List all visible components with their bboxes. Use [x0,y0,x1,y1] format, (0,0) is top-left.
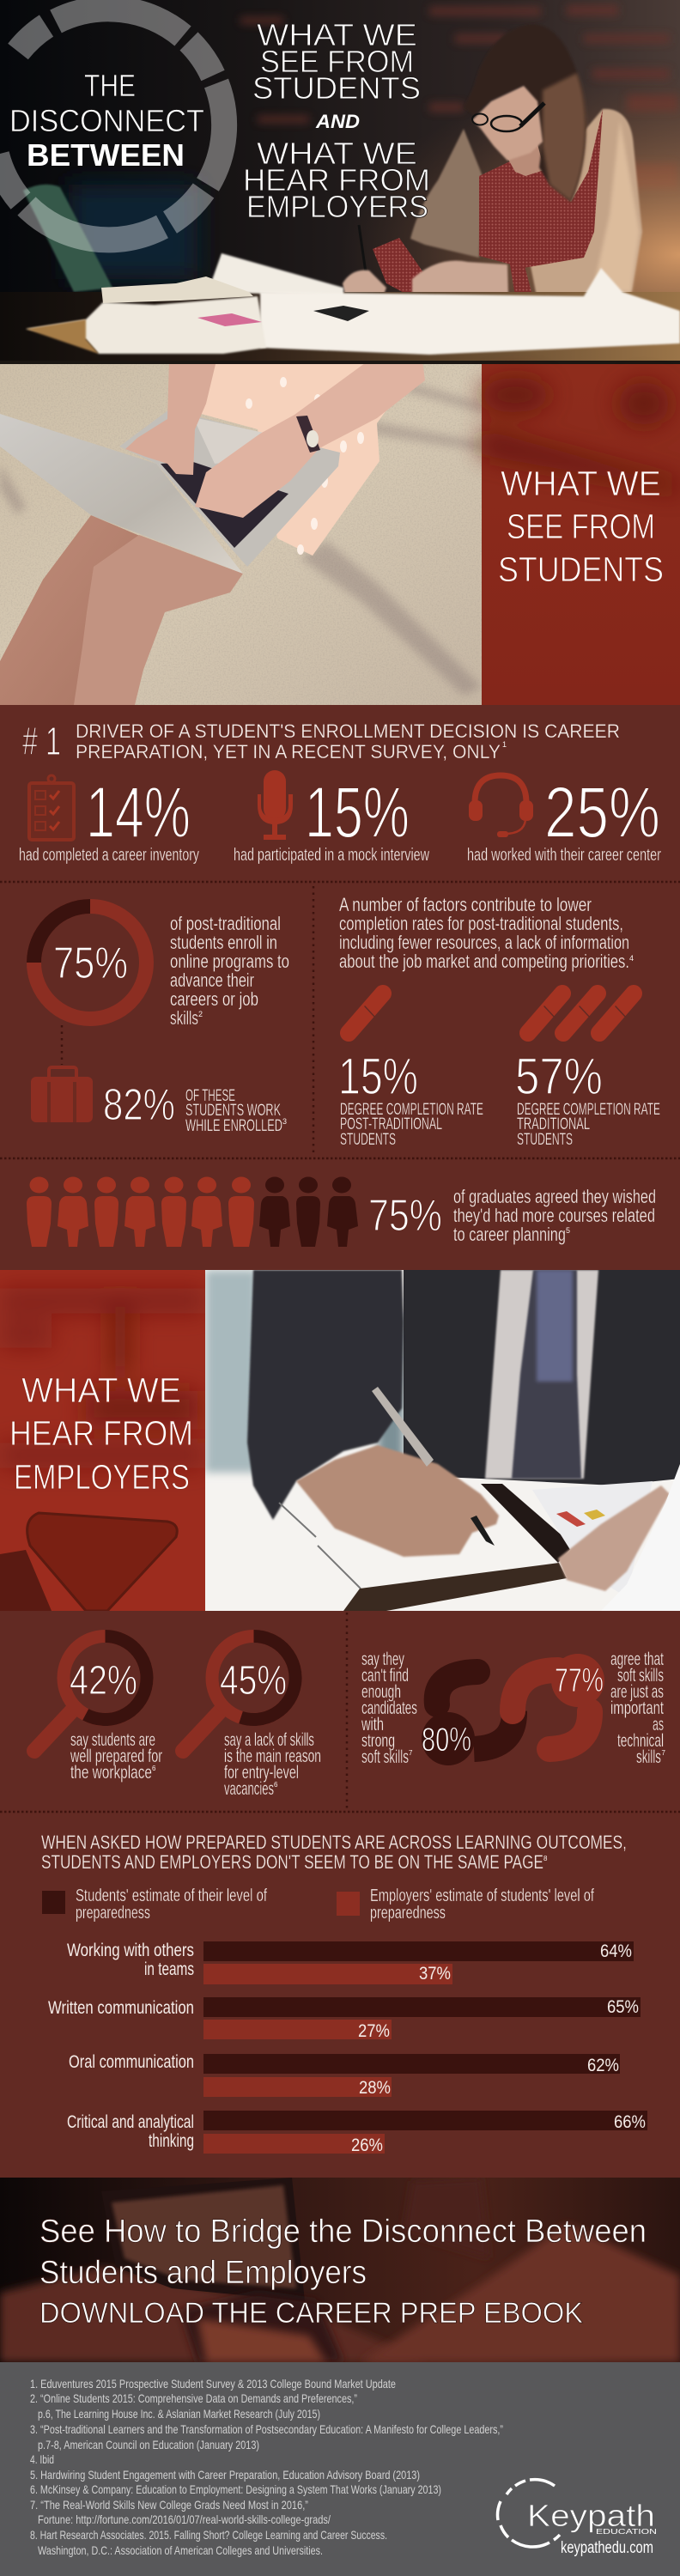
references: 3. “Post-traditional Learners and the Transformation of Postsecondary Education: A Manifesto for College Leaders,” [30,2422,503,2436]
stat: 82%: WHILE ENROLLED [185,1117,282,1135]
right arm and hand [195,361,425,518]
text: can't find candidates: 7 [409,1749,413,1757]
back leg [0,515,142,705]
text: can't find candidates: candidates [361,1698,417,1718]
right sleeve [529,109,642,296]
hero heading center: WHAT WE [257,136,417,171]
pencil [357,225,367,270]
row: critical thinking: 66% [614,2112,646,2132]
heading: WHAT WE [21,1370,181,1410]
stat: 15% degree completion: 15% [338,1048,418,1105]
row: oral communication [69,2052,620,2098]
references [30,2377,503,2557]
text: post-traditional students: advance their [170,969,254,991]
laptop base [119,410,340,567]
legend: employers: preparedness [370,1904,446,1923]
text: post-traditional students: skills [170,1007,198,1029]
neck [508,144,543,176]
left arm and hand [125,361,216,475]
heading [498,464,664,589]
references: 6. McKinsey & Company: Education to Employment: Designing a System That Works (January 2013) [30,2482,441,2496]
text: can't find candidates: can't find [361,1666,409,1686]
row: critical thinking: 26% [351,2136,383,2155]
references: Washington, D.C.: Association of American Colleges and Universities. [38,2543,323,2557]
text: well prepared: the workplace [70,1763,152,1783]
magnifier chart: 45%: 45% [220,1658,287,1704]
text: well prepared: say students are [70,1730,155,1750]
references: p.7-8, American Council on Education (January 2013) [38,2438,259,2451]
row: written communication [48,1997,641,2041]
strip over section top [0,361,680,364]
row: critical thinking [67,2111,647,2155]
cta text [39,2214,647,2330]
stat: 14%: had completed a career inventory [19,846,199,865]
references: Fortune: http://fortune.com/2016/01/07/real-world-skills-college-grads/ [38,2512,331,2526]
legend: students: preparedness [76,1904,150,1923]
chart paper [532,1481,653,1597]
hero heading center: HEAR FROM [243,162,430,197]
hero heading left: BETWEEN [27,137,185,173]
front leg [74,535,243,705]
stat: 15% degree completion [338,1048,483,1149]
stat: 25% [467,772,661,865]
face [472,86,543,161]
#1 driver heading: 1 [502,740,507,749]
heading: EMPLOYERS [14,1457,190,1497]
stat: 15% [234,772,429,865]
cta text: Students and Employers [39,2255,367,2291]
shirt [485,1270,598,1479]
row: critical thinking: Critical and analytical [67,2112,194,2132]
stat: 14%: 14% [86,772,191,853]
icon: diploma [349,993,383,1033]
keypath logo: keypathedu.com [561,2539,653,2557]
woman [343,24,642,311]
#1 driver heading: PREPARATION, YET IN A RECENT SURVEY, ONLY [76,741,501,762]
red cuffs [373,238,531,296]
call to action panel [0,2178,680,2362]
legend: students: Students' estimate of their level of [76,1886,267,1905]
references: 8. Hart Research Associates. 2015. Falling Short? College Learning and Career Success. [30,2528,387,2542]
text: can't find candidates: with [361,1715,384,1735]
#1 driver heading: DRIVER OF A STUDENT'S ENROLLMENT DECISION IS CAREER [76,720,620,742]
icons: three diplomas [528,993,634,1033]
text: soft skills important: 7 [662,1749,666,1757]
keypath logo: EDUCATION [596,2528,657,2536]
tie [512,1270,581,1479]
notebook rings [279,1503,361,1589]
dress [202,364,386,556]
stat: 15% degree completion: POST-TRADITIONAL [340,1115,442,1133]
photo: employer writing in notebook [205,1270,680,1611]
references: 7. “The Real-World Skills New College Grads Need Most in 2016,” [30,2498,308,2512]
text: factors: 4 [629,954,634,963]
stat: 75% graduates: 75% [368,1191,442,1241]
row: critical thinking: thinking [149,2131,194,2151]
row: oral communication: Oral communication [69,2052,194,2072]
text: can't find candidates: enough [361,1682,401,1702]
watch [296,416,320,453]
linked chain graphic: 80% and 77%: 80% [422,1722,471,1759]
text: can't find candidates: strong [361,1731,395,1751]
donut chart: 75% [34,907,146,1018]
icon: headset [469,775,533,837]
stat: 57% degree completion: STUDENTS [517,1131,573,1149]
notebook [101,276,253,303]
magnifier chart: 42%: 42% [70,1658,137,1704]
stat: 15%: had participated in a mock interview [234,846,429,865]
#1 driver heading [22,719,620,763]
text: soft skills important [610,1649,666,1767]
text: post-traditional students: online programs to [170,951,289,972]
text: post-traditional students: students enroll in [170,932,277,953]
hero heading center: STUDENTS [252,70,421,106]
stat: 15% degree completion: DEGREE COMPLETION RATE [340,1101,483,1119]
text: can't find candidates: soft skills [361,1747,409,1767]
legend: students [42,1886,267,1923]
hero panel [0,0,680,364]
text: lack of skills: say a lack of skills [224,1730,314,1750]
hair [464,24,586,202]
text: well prepared: 6 [152,1765,156,1772]
chart heading [41,1832,627,1873]
row: working with others: in teams [144,1959,194,1979]
stat: 82%: 3 [282,1117,287,1126]
photo: student with laptop [0,361,482,705]
left sleeve [410,129,483,258]
red dress [479,109,603,268]
text: lack of skills: vacancies [224,1779,274,1799]
text: can't find candidates [361,1649,417,1767]
row: oral communication: 28% [359,2078,391,2098]
heading: WHAT WE [501,464,661,503]
row: written communication: Written communication [48,1998,194,2018]
panel: what we see from students [481,364,680,705]
heading: HEAR FROM [9,1413,193,1453]
panel: what we hear from employers [0,1270,205,1611]
references: 4. Ibid [30,2452,54,2466]
keyboard [161,462,288,548]
text: factors [339,894,634,972]
cta text: DOWNLOAD THE CAREER PREP EBOOK [39,2297,583,2330]
row: written communication: 27% [358,2021,390,2041]
carpet [0,364,482,705]
stat: 15%: 15% [305,772,410,853]
text: well prepared [70,1730,162,1783]
dark phone case [481,1484,574,1563]
text: lack of skills: is the main reason [224,1747,321,1766]
donut chart: 75%: 75% [53,939,128,988]
hands [342,259,510,292]
text: post-traditional students: 2 [198,1010,203,1018]
hero heading left: DISCONNECT [9,103,204,138]
linked chain graphic: 80% and 77%: 77% [555,1662,604,1699]
stat: 82% [103,1080,287,1135]
bar chart [48,1941,647,2155]
icon: clipboard [29,775,74,840]
text: lack of skills: 6 [274,1781,278,1789]
row: written communication: 65% [607,1997,639,2017]
icon: briefcase [31,1067,93,1122]
references: 2. “Online Students 2015: Comprehensive Data on Demands and Preferences,” [30,2391,357,2405]
table and papers [0,292,680,364]
stat: 57% degree completion: TRADITIONAL [517,1115,590,1133]
row: working with others [67,1941,634,1984]
linked chain graphic: 80% and 77% [422,1654,604,1765]
text: soft skills important: as [653,1715,664,1735]
glasses [472,103,544,131]
text: post-traditional students: careers or job [170,988,258,1010]
stat: 82%: STUDENTS WORK [185,1102,281,1120]
pen [372,1387,434,1467]
#1 driver heading: # 1 [22,719,61,763]
hand holding pen [296,1445,499,1557]
hero heading left: THE [84,68,136,103]
row: working with others: 64% [600,1941,632,1961]
keypath logo: Keypath [527,2498,655,2533]
row: oral communication: 62% [587,2056,619,2075]
hero photo: woman writing at table [0,0,680,364]
stat: 15% degree completion: STUDENTS [340,1131,396,1149]
stat: 82%: 82% [103,1080,175,1130]
references: p.6, The Learning House Inc. & Aslanian Market Research (July 2015) [38,2407,320,2421]
blurred laptop photo [0,2178,680,2362]
stat: 75% graduates: 5 [566,1226,570,1235]
text: post-traditional students [170,913,289,1029]
stat: 57% degree completion [515,1048,660,1149]
magnifier chart: 42% [34,1637,147,1751]
text: can't find candidates: say they [361,1649,404,1669]
text: post-traditional students: of post-traditional [170,913,281,934]
hero heading left [12,75,203,166]
text: lack of skills [224,1730,321,1799]
hero heading center: SEE FROM [260,44,414,79]
text: factors: A number of factors contribute to lower [339,894,592,915]
right hand [558,1485,670,1591]
references: 5. Hardwiring Student Engagement with Career Preparation, Education Advisory Board (2013) [30,2468,420,2482]
laptop lid [0,414,243,574]
hero heading center: WHAT WE [257,17,417,52]
stat: 57% degree completion: 57% [515,1048,603,1105]
stat: 82%: OF THESE [185,1087,235,1105]
text: well prepared: well prepared for [70,1747,162,1766]
cta text: See How to Bridge the Disconnect Between [39,2214,647,2250]
stat: 75% graduates [368,1186,656,1245]
hero heading center: EMPLOYERS [246,189,428,224]
hero heading center: AND [315,111,360,132]
text: soft skills important: skills [636,1747,661,1767]
heading [12,1377,191,1490]
chair silhouette [27,1513,177,1611]
row: working with others: Working with others [67,1941,194,1960]
references: 1. Eduventures 2015 Prospective Student Survey & 2013 College Bound Market Update [30,2377,396,2391]
notebook band [343,1563,567,1611]
chart heading: STUDENTS AND EMPLOYERS DON'T SEEM TO BE ON THE SAME PAGE [41,1851,543,1873]
suit [404,1270,680,1485]
keypath logo [498,2480,657,2557]
icon: microphone [258,770,293,840]
magnifier chart: 45% [183,1636,295,1751]
stat: 75% graduates: to career planning [453,1224,566,1245]
footer panel [0,2362,680,2576]
text: lack of skills: for entry-level [224,1763,299,1783]
laptop [601,1464,680,1611]
row: working with others: 37% [419,1964,451,1984]
legend: employers: Employers' estimate of students' level of [370,1886,594,1905]
legend: employers [337,1886,594,1923]
chart heading: 8 [543,1855,548,1862]
hero heading center [243,17,430,224]
chair with green cloth [23,185,112,292]
segmented ring [0,9,224,240]
people pictogram [27,1176,358,1247]
stat: 14% [19,772,199,865]
